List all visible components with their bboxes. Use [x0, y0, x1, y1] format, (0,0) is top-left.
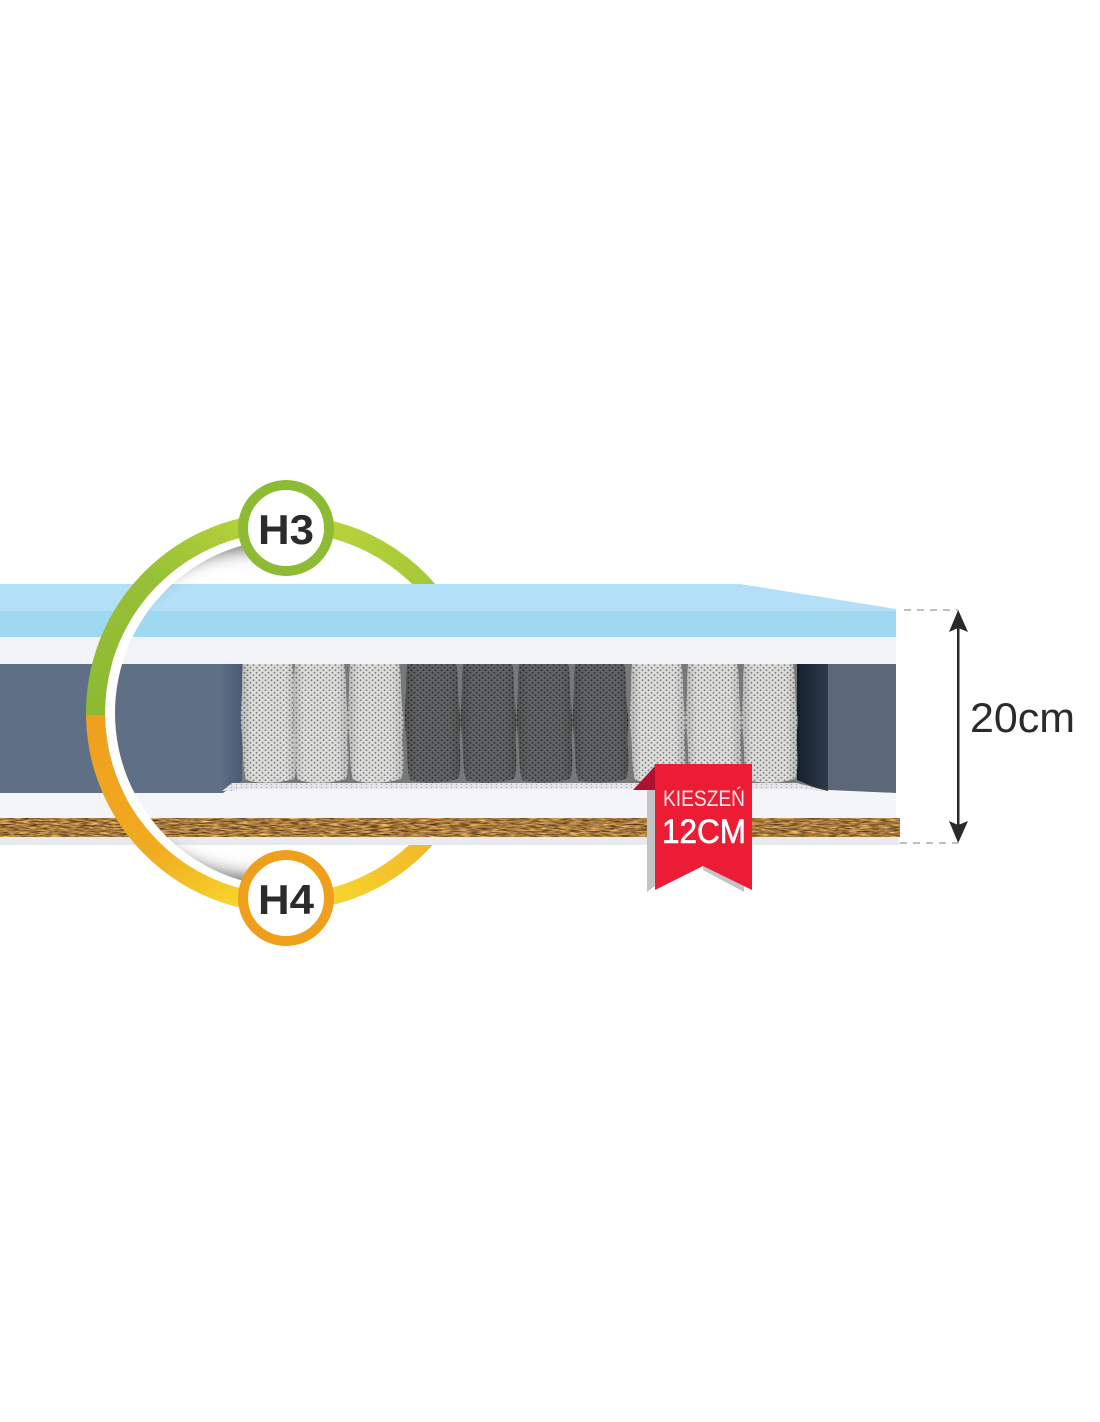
H3 badge: H3 — [258, 506, 314, 553]
redraw of mattress band under shadow — [64, 584, 128, 845]
spring 2 light — [293, 664, 349, 783]
coconut fibre layer — [0, 818, 900, 837]
pocket springs — [241, 664, 798, 783]
mesh base under springs — [222, 783, 828, 791]
H3 badge — [243, 485, 329, 571]
left side foam block — [0, 664, 223, 793]
H4 badge: H4 — [258, 876, 315, 923]
ribbon shadow — [647, 790, 744, 892]
left foam inner face — [223, 664, 242, 793]
H4 badge — [243, 855, 329, 941]
light fade over mattress — [64, 584, 128, 845]
inner shadow of firmness ring — [124, 533, 268, 892]
ring: green left arc — [95, 522, 286, 715]
ribbon fold — [633, 766, 655, 790]
right foam inner dark face — [797, 664, 828, 793]
bottom grey cover — [0, 837, 900, 845]
ribbon label top: KIESZEŃ — [663, 786, 745, 811]
double arrow — [949, 610, 968, 843]
spring 8 light — [630, 664, 686, 783]
spring 10 light — [742, 664, 798, 783]
spring 1 light — [241, 664, 297, 783]
shadow above mattress — [162, 546, 252, 594]
ring: orange left arc — [96, 715, 286, 904]
height dimension — [900, 610, 1075, 843]
lower white foam layer — [0, 789, 896, 818]
ring: right arcs behind mattress — [286, 524, 450, 902]
white crescent inside ring — [105, 532, 289, 894]
mattress cross-section infographic — [0, 480, 1072, 946]
ribbon body — [655, 764, 752, 890]
top layer: light blue foam — [0, 584, 896, 637]
shadow below mattress — [161, 830, 252, 880]
spring 3 light — [348, 664, 404, 783]
mattress cross-section — [0, 584, 900, 845]
right foam block — [828, 664, 896, 793]
spring 7 dark — [573, 664, 629, 783]
upper white foam layer — [0, 637, 896, 664]
ribbon badge: pocket 12cm — [633, 764, 752, 892]
spring 5 dark — [461, 664, 517, 783]
spring 4 dark — [405, 664, 461, 783]
spring 9 light — [686, 664, 742, 783]
height label: 20cm — [970, 694, 1075, 741]
ribbon label bottom: 12CM — [662, 813, 746, 851]
dashed guides — [900, 610, 958, 843]
spring 6 dark — [517, 664, 573, 783]
spring chamber background — [223, 664, 828, 791]
top layer: darker blue band — [0, 611, 896, 637]
